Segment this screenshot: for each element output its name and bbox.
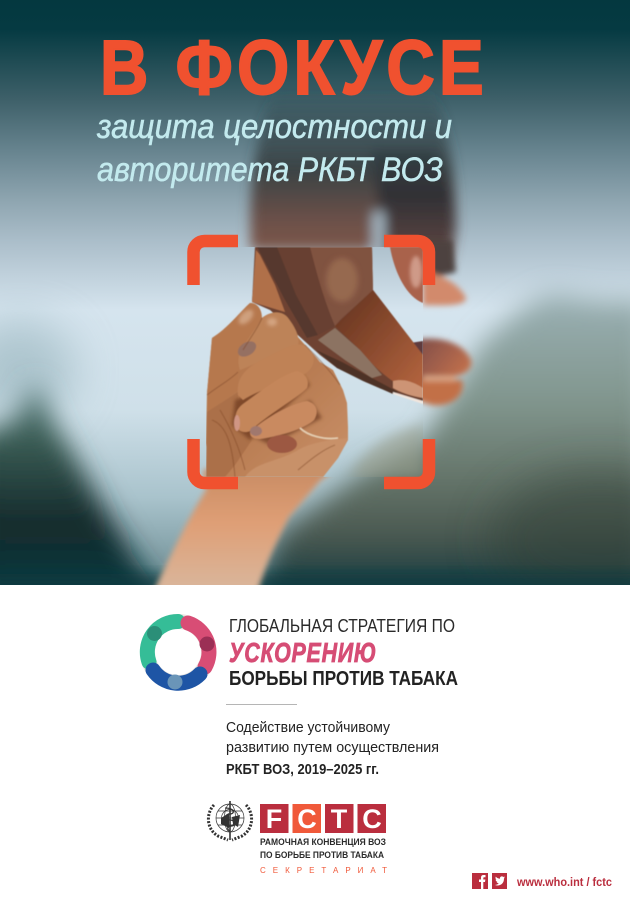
blurred child forearm: [152, 466, 332, 585]
peach finger tip: [393, 380, 423, 398]
text block: strategy description: развитию путем осуществления: [226, 739, 439, 756]
finger B: [235, 371, 308, 432]
text block: strategy description: РКБТ ВОЗ, 2019–2025 гг.: [226, 761, 379, 778]
text block: FCTC full name: ПО БОРЬБЕ ПРОТИВ ТАБАКА: [260, 850, 384, 861]
curled pinky: [267, 435, 297, 453]
logo: FCTC blocks: C: [362, 804, 382, 834]
photo: blurred hand parts outside the frame: [152, 87, 471, 595]
text block: FCTC full name: [260, 837, 386, 861]
darkest lower finger: [316, 350, 398, 394]
blurred adult hand above frame: [250, 87, 456, 262]
speckled background in lower right of frame: [350, 425, 423, 477]
finger shadows: [232, 372, 310, 440]
heading: global strategy: УСКОРЕНИЮ: [229, 637, 377, 668]
palm left with creases: [206, 392, 252, 477]
subtitle: авторитета РКБТ ВОЗ: [97, 151, 443, 189]
grey wrinkled finger: [318, 328, 382, 378]
heading: global strategy: [229, 615, 458, 690]
middle finger: [288, 273, 304, 310]
blurred fingers right: [415, 339, 471, 405]
subtitle: [96, 120, 452, 188]
logo: FCTC blocks: T: [331, 804, 348, 834]
photo: sharp hands inside frame: [206, 247, 423, 477]
heading: global strategy: ГЛОБАЛЬНАЯ СТРАТЕГИЯ ПО: [229, 615, 455, 636]
adult wrist part: [252, 250, 285, 312]
right knuckle: [310, 247, 373, 326]
white rim under finger: [393, 392, 423, 404]
text block: strategy description: Содействие устойчивому: [226, 719, 390, 736]
adult hand base: [252, 247, 423, 403]
sharp top-right thumb: [390, 247, 423, 303]
ridge finger: [257, 247, 318, 338]
child thumb: [206, 303, 254, 392]
finger C: [250, 401, 317, 439]
logo: FCTC blocks: [260, 804, 386, 834]
text block: strategy description: [226, 719, 439, 778]
blurred thumb top right: [418, 240, 466, 305]
icon: WHO emblem: [208, 801, 252, 840]
haze behind tree: [0, 320, 75, 420]
index finger: [238, 312, 299, 370]
dark bit of adult finger: [413, 340, 423, 355]
adult thumb: [335, 290, 423, 395]
blurred hills on the right: [250, 293, 630, 610]
icon: facebook: [472, 873, 488, 889]
child hand base: [206, 303, 348, 477]
icon: global strategy ring logo: [147, 621, 214, 690]
subtitle: защита целостности и: [96, 108, 452, 146]
hand creases: [207, 318, 340, 477]
heel of the hand: [246, 440, 338, 477]
text block: FCTC full name: РАМОЧНАЯ КОНВЕНЦИЯ ВОЗ: [260, 837, 386, 848]
blurred tree on the left: [0, 378, 162, 585]
text: website url: www.who.int / fctc: [516, 877, 613, 889]
panel: photo background: [0, 0, 630, 610]
logo: FCTC blocks: C: [297, 804, 317, 834]
text: secretariat: СЕКРЕТАРИАТ: [260, 866, 387, 875]
finger A: [238, 345, 314, 400]
heading: global strategy: БОРЬБЫ ПРОТИВ ТАБАКА: [229, 668, 458, 690]
title: В ФОКУСЕ: [100, 25, 488, 111]
icon: twitter: [492, 873, 507, 889]
logo: FCTC blocks: F: [266, 804, 282, 834]
icon: orange focus frame brackets: [194, 241, 429, 483]
